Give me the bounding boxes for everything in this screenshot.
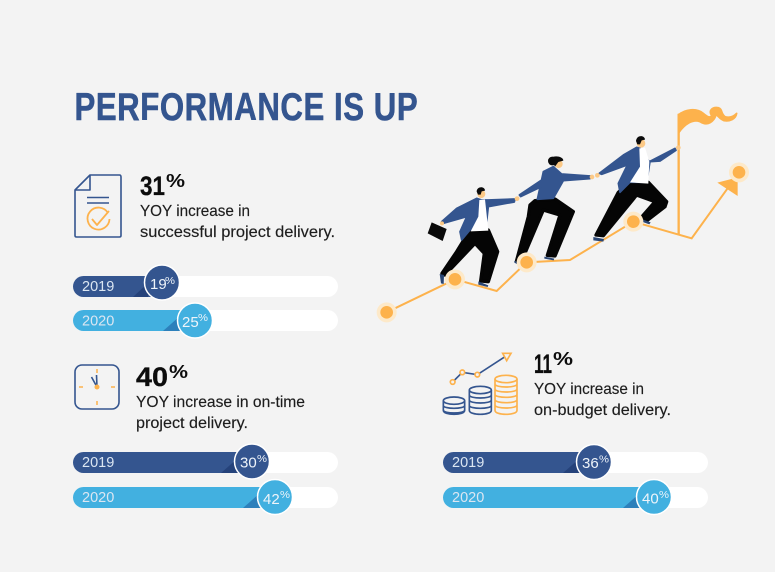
figure: woman (514, 156, 594, 266)
flag (678, 108, 737, 234)
stat: 40% (136, 362, 188, 392)
bar: 2019 30%: % (257, 454, 267, 465)
bar: 2020 42%: 42 (263, 491, 280, 508)
bar: 2020 40%: % (659, 490, 669, 501)
panel: successful project delivery (73, 171, 338, 338)
panel: on-budget delivery (443, 349, 708, 514)
bar: 2020 40%: 40 (642, 490, 659, 508)
stat: 40%: 40 (136, 362, 168, 392)
description (140, 203, 335, 241)
stat: 31%: 31 (140, 171, 165, 201)
bar: 2019 36%: % (599, 454, 609, 466)
bar: 2019 36%: 2019 (452, 455, 484, 471)
description (136, 394, 305, 432)
description: YOY increase in (534, 381, 644, 398)
stat: 40%: % (169, 362, 188, 382)
rising line (387, 177, 738, 312)
bar: 2019 30% (73, 444, 338, 479)
icon: clock (75, 365, 119, 409)
title: PERFORMANCE IS UP (74, 86, 418, 129)
bar: 2020 42%: % (280, 490, 290, 501)
stat: 31% (140, 171, 185, 201)
description: on-budget delivery. (534, 402, 671, 419)
description: project delivery. (136, 415, 248, 432)
bar: 2019 36% (443, 444, 708, 480)
bar: 2019 36%: 36 (582, 455, 599, 472)
illustration: team climbing a rising line to a flag (377, 108, 749, 322)
icon: coin stacks with trend line (443, 353, 517, 414)
description: successful project delivery. (140, 224, 335, 241)
bar: 2020 25%: 25 (182, 314, 199, 331)
bar: 2019 30%: 2019 (82, 455, 114, 471)
figure: man with briefcase (428, 187, 519, 287)
description: YOY increase in (140, 203, 250, 220)
bar: 2020 25% (73, 303, 338, 338)
bar: 2019 19%: 2019 (82, 279, 114, 295)
line nodes (377, 162, 749, 322)
icon: document with check (75, 175, 121, 237)
bar: 2019 30%: 30 (240, 454, 257, 472)
bar: 2020 40% (443, 480, 708, 514)
stat: 11%: 11 (534, 349, 552, 379)
bar: 2019 19%: 19 (150, 276, 167, 293)
bar: 2020 42% (73, 480, 338, 514)
figure: leading man (593, 136, 681, 242)
bar: 2020 25%: % (198, 313, 208, 324)
description (534, 381, 671, 419)
bar: 2019 19%: % (165, 276, 175, 287)
bar: 2020 25%: 2020 (82, 314, 114, 330)
bar: 2020 40%: 2020 (452, 490, 484, 506)
stat: 11%: % (553, 349, 573, 369)
panel: on-time project delivery (73, 362, 338, 514)
bar: 2019 19% (73, 265, 338, 300)
stat: 31%: % (166, 171, 185, 191)
bar: 2020 42%: 2020 (82, 490, 114, 506)
description: YOY increase in on-time (136, 394, 305, 411)
